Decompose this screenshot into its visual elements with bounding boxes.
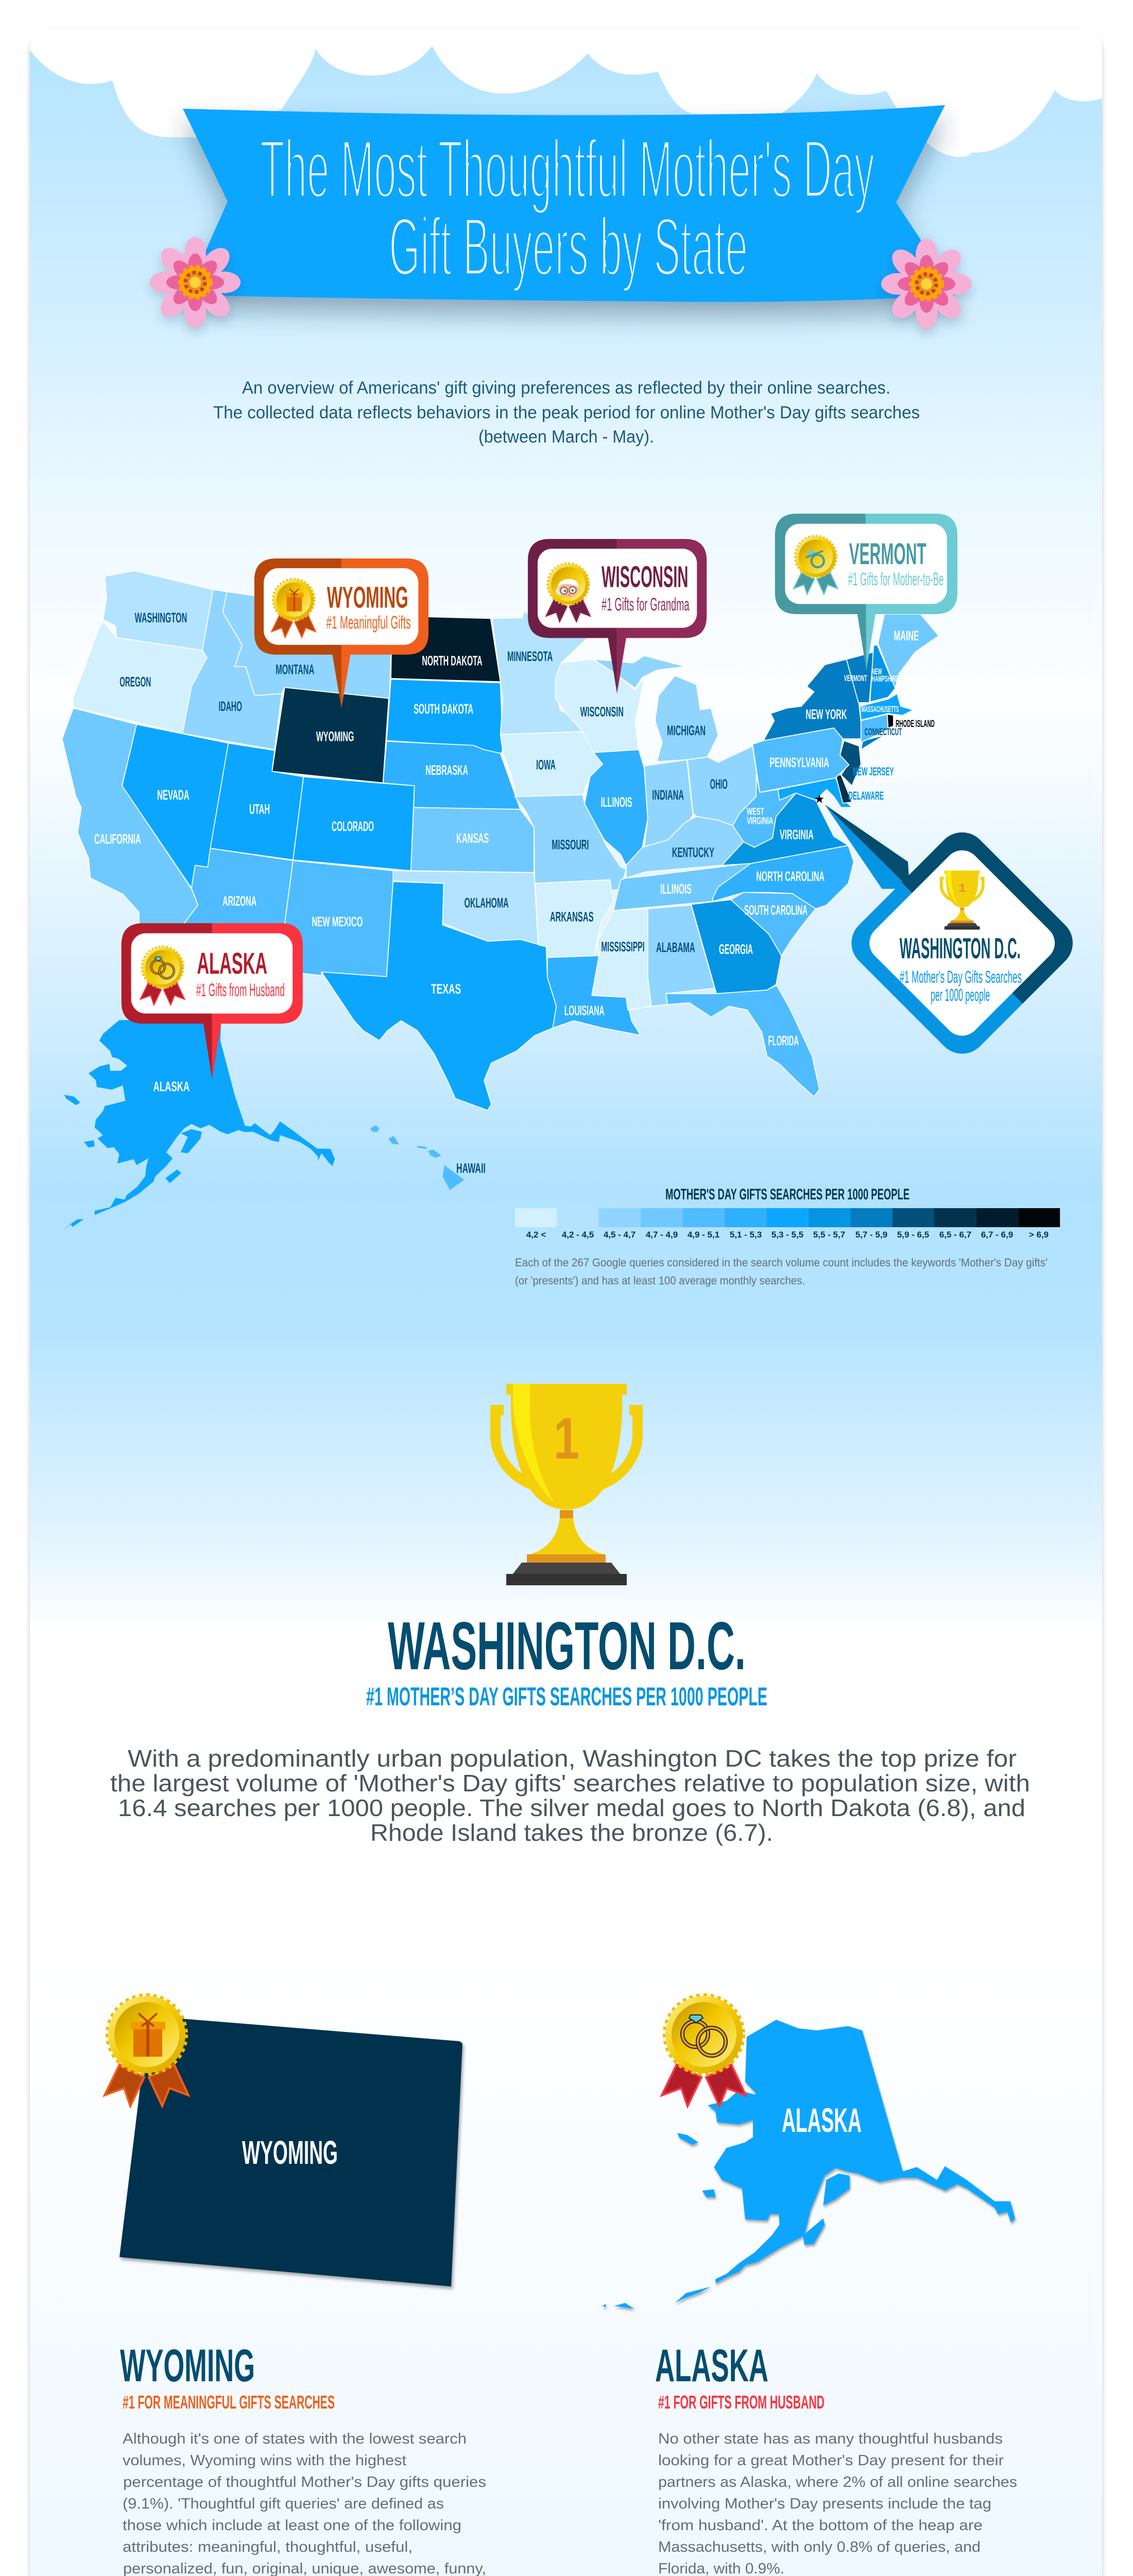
map: eastern state labels: NEW JERSEY	[853, 765, 894, 778]
callout: Vermont: VERMONT	[849, 537, 926, 571]
map: eastern state labels: MASSACHUSETTS	[861, 704, 899, 714]
Hawaii shape	[370, 1125, 464, 1190]
map: eastern state labels: CONNECTICUT	[865, 726, 902, 738]
title text	[260, 123, 874, 293]
map: western state labels: CALIFORNIA	[94, 831, 141, 846]
body text: involving Mother's Day presents include the tag	[658, 2496, 991, 2512]
map: eastern state labels: FLORIDA	[768, 1033, 799, 1048]
map: eastern state labels: DELAWARE	[848, 789, 884, 802]
legend note	[515, 1256, 1048, 1287]
map: eastern state labels: ALABAMA	[656, 940, 695, 955]
map: eastern state labels: WEST	[747, 806, 764, 817]
state shape: Wyoming	[119, 2016, 462, 2286]
map: western state labels: MINNESOTA	[507, 649, 553, 664]
map: eastern state labels: MAINE	[894, 628, 919, 643]
legend swatches	[515, 1208, 1060, 1227]
map: eastern state labels: OHIO	[710, 776, 728, 792]
body text: partners as Alaska, where 2% of all online searches	[658, 2474, 1017, 2490]
legend note: Each of the 267 Google queries considered in the search volume count includes the keywords 'Mother's Day gifts'	[515, 1256, 1048, 1269]
icon: left flower	[150, 237, 241, 328]
paragraph: With a predominantly urban population, Washington DC takes the top prize for	[128, 1745, 1017, 1772]
body text: No other state has as many thoughtful husbands	[658, 2431, 1003, 2447]
icon: trophy	[495, 1384, 638, 1585]
map: eastern state labels: MICHIGAN	[667, 723, 706, 738]
body text: those which include at least one of the following	[123, 2517, 461, 2534]
map: western state labels: NORTH DAKOTA	[422, 653, 483, 669]
icon: medal with gift	[105, 1996, 188, 2106]
panel: Wyoming	[105, 1996, 486, 2576]
callout: Alaska: ALASKA	[197, 947, 267, 980]
intro text: An overview of Americans' gift giving preferences as reflected by their online searches.	[242, 378, 890, 398]
callout: Wyoming: #1 Meaningful Gifts	[326, 613, 411, 633]
legend value labels: 5,5 - 5,7	[813, 1230, 845, 1240]
subheading: #1 FOR MEANINGFUL GIFTS SEARCHES	[123, 2392, 335, 2413]
map: western state labels: MISSOURI	[552, 837, 589, 853]
state label: WYOMING	[242, 2134, 338, 2171]
map: western state labels: NEBRASKA	[425, 762, 468, 778]
US map with state shapes, labels and callouts	[62, 571, 939, 1231]
map: eastern state labels: RHODE ISLAND	[896, 718, 935, 730]
map: western state labels: HAWAII	[456, 1161, 486, 1176]
icon: medal with rings	[662, 1996, 746, 2106]
map: eastern state labels: ILLINOIS	[601, 794, 632, 810]
map: western states	[62, 571, 556, 1110]
callout: Washington D.C.: per 1000 people	[931, 986, 990, 1005]
callout: Wisconsin	[528, 539, 707, 693]
legend value labels: 4,9 - 5,1	[688, 1230, 719, 1240]
body text: Although it's one of states with the lowest search	[123, 2431, 467, 2447]
map: western state labels: COLORADO	[332, 819, 374, 834]
icon: trophy: 1	[554, 1406, 579, 1471]
map: western state labels: TEXAS	[431, 981, 461, 997]
legend value labels: 5,3 - 5,5	[771, 1230, 803, 1240]
map: eastern state labels	[580, 628, 935, 1048]
map: eastern state labels: PENNSYLVANIA	[769, 755, 829, 770]
callout: Washington D.C.	[825, 805, 1083, 1064]
map: western state labels: IDAHO	[218, 699, 242, 714]
map: western state labels: WYOMING	[316, 728, 354, 744]
map: western state labels: OKLAHOMA	[464, 895, 509, 911]
legend value labels: 4,2 - 4,5	[562, 1230, 594, 1240]
intro text	[213, 378, 920, 447]
paragraph: the largest volume of 'Mother's Day gifts' searches relative to population size, with	[110, 1770, 1030, 1797]
subheading: #1 FOR GIFTS FROM HUSBAND	[658, 2392, 825, 2413]
body text: Massachusetts, with only 0.8% of queries, and	[658, 2539, 981, 2555]
map: eastern state labels: INDIANA	[652, 787, 684, 803]
body text	[123, 2431, 486, 2576]
map: eastern state labels: WISCONSIN	[580, 704, 624, 720]
section: Washington D.C.	[110, 1384, 1030, 1846]
map: western state labels: NEW MEXICO	[312, 914, 363, 929]
body text: attributes: meaningful, thoughtful, useful,	[123, 2539, 413, 2555]
map: eastern state labels: NEW YORK	[805, 706, 847, 722]
map: eastern state labels: NORTH CAROLINA	[756, 869, 825, 884]
panel: Alaska	[602, 1996, 1017, 2576]
heading: Washington D.C.: WASHINGTON D.C.	[388, 1608, 746, 1684]
paragraph: Rhode Island takes the bronze (6.7).	[370, 1819, 773, 1846]
map: western state labels: ARIZONA	[222, 893, 256, 909]
map: eastern state labels: VIRGINIA	[780, 827, 814, 842]
title banner	[183, 105, 957, 302]
map: western state labels	[94, 610, 605, 1176]
callout: Washington D.C.: 1	[958, 882, 966, 894]
body text	[658, 2431, 1017, 2576]
map: eastern state labels: SOUTH CAROLINA	[744, 903, 808, 918]
legend value labels: > 6,9	[1029, 1230, 1049, 1240]
callout: Wyoming	[254, 558, 428, 708]
map: eastern state labels: NEW	[872, 667, 882, 676]
subheading: #1 MOTHER’S DAY GIFTS SEARCHES PER 1000 PEOPLE	[366, 1682, 767, 1711]
state shape: Alaska	[602, 2020, 1015, 2309]
legend note: (or 'presents') and has at least 100 average monthly searches.	[515, 1274, 805, 1287]
map: Alaska and Hawaii	[62, 1020, 464, 1231]
legend title: MOTHER'S DAY GIFTS SEARCHES PER 1000 PEOPLE	[665, 1186, 909, 1203]
callout: Vermont: #1 Gifts for Mother-to-Be	[848, 569, 943, 589]
body text: volumes, Wyoming wins with the highest	[123, 2452, 406, 2469]
legend	[515, 1186, 1060, 1287]
callout: Wisconsin: #1 Gifts for Grandma	[602, 595, 690, 615]
clouds: top	[30, 29, 1102, 157]
body text: looking for a great Mother's Day present for their	[658, 2452, 1004, 2469]
legend value labels	[526, 1230, 1049, 1240]
legend value labels: 4,7 - 4,9	[646, 1230, 678, 1240]
body text: percentage of thoughtful Mother's Day gifts queries	[123, 2474, 486, 2490]
map: western state labels: UTAH	[249, 801, 270, 817]
legend value labels: 5,7 - 5,9	[855, 1230, 887, 1240]
state label: ALASKA	[782, 2101, 862, 2139]
legend value labels: 4,2 <	[526, 1230, 546, 1240]
legend value labels: 4,5 - 4,7	[604, 1230, 636, 1240]
callout: Wyoming: WYOMING	[327, 581, 408, 614]
map: eastern state labels: KENTUCKY	[672, 844, 714, 860]
intro text: The collected data reflects behaviors in the peak period for online Mother's Day gifts searches	[213, 403, 920, 422]
intro text: (between March - May).	[478, 427, 654, 447]
map: western state labels: LOUISIANA	[564, 1003, 605, 1019]
icon: Washington DC star marker	[815, 794, 823, 803]
Alaska shape	[62, 1020, 335, 1231]
legend value labels: 5,9 - 6,5	[897, 1230, 929, 1240]
body text: (9.1%). 'Thoughtful gift queries' are defined as	[123, 2496, 444, 2512]
map: central and eastern states	[492, 611, 939, 1097]
map: western state labels: IOWA	[536, 757, 556, 773]
map: eastern state labels: VERMONT	[844, 673, 867, 683]
map: eastern state labels: ILLINOIS	[660, 881, 692, 896]
map: eastern state labels: VIRGINIA	[747, 816, 773, 827]
map: eastern state labels: HAMPSHIRE	[872, 674, 898, 684]
heading: WYOMING	[120, 2340, 255, 2391]
map: western state labels: ARKANSAS	[550, 909, 594, 924]
paragraph	[110, 1745, 1030, 1846]
callout: Wisconsin: WISCONSIN	[602, 560, 688, 594]
map: western state labels: OREGON	[119, 674, 151, 689]
body text: 'from husband'. At the bottom of the heap are	[658, 2517, 983, 2534]
map: western state labels: WASHINGTON	[135, 610, 187, 625]
map: eastern state labels: MISSISSIPPI	[601, 939, 645, 955]
map: eastern state labels: GEORGIA	[719, 941, 753, 957]
paragraph: 16.4 searches per 1000 people. The silver medal goes to North Dakota (6.8), and	[118, 1794, 1025, 1821]
callout: Alaska: #1 Gifts from Husband	[196, 980, 285, 1001]
banner ribbon shape	[183, 105, 957, 302]
legend value labels: 6,5 - 6,7	[939, 1230, 971, 1240]
map: western state labels: KANSAS	[456, 831, 489, 846]
map: western state labels: NEVADA	[157, 787, 190, 803]
map: western state labels: MONTANA	[276, 662, 314, 677]
title text: Gift Buyers by State	[389, 200, 748, 293]
legend value labels: 5,1 - 5,3	[730, 1230, 762, 1240]
callout: Alaska	[122, 923, 303, 1079]
heading: ALASKA	[655, 2340, 768, 2391]
map: western state labels: ALASKA	[153, 1079, 190, 1094]
icon: right flower	[881, 239, 972, 329]
callout: Vermont	[775, 514, 957, 670]
map: western state labels: SOUTH DAKOTA	[414, 701, 473, 717]
legend value labels: 6,7 - 6,9	[981, 1230, 1013, 1240]
